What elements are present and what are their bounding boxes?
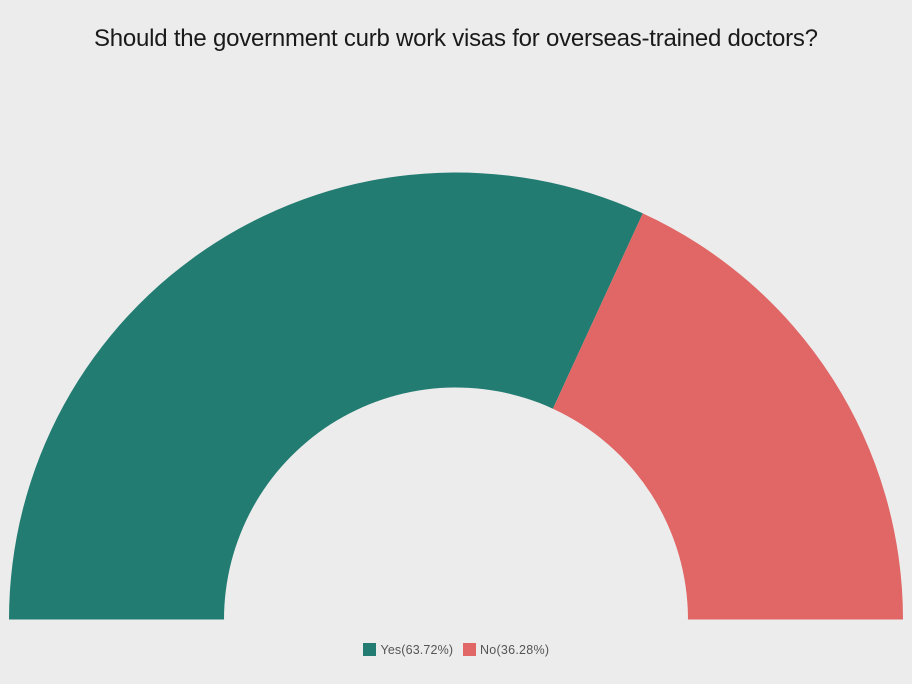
segment: Yes 63.72% [9,172,643,620]
title: Should the government curb work visas for overseas-trained doctors? [94,25,818,52]
segment: No 36.28% [553,213,903,620]
chart: semi-donut [9,172,903,620]
legend [363,643,549,657]
legend item: No: No(36.28%) [480,643,549,657]
legend item: Yes: Yes(63.72%) [380,643,453,657]
